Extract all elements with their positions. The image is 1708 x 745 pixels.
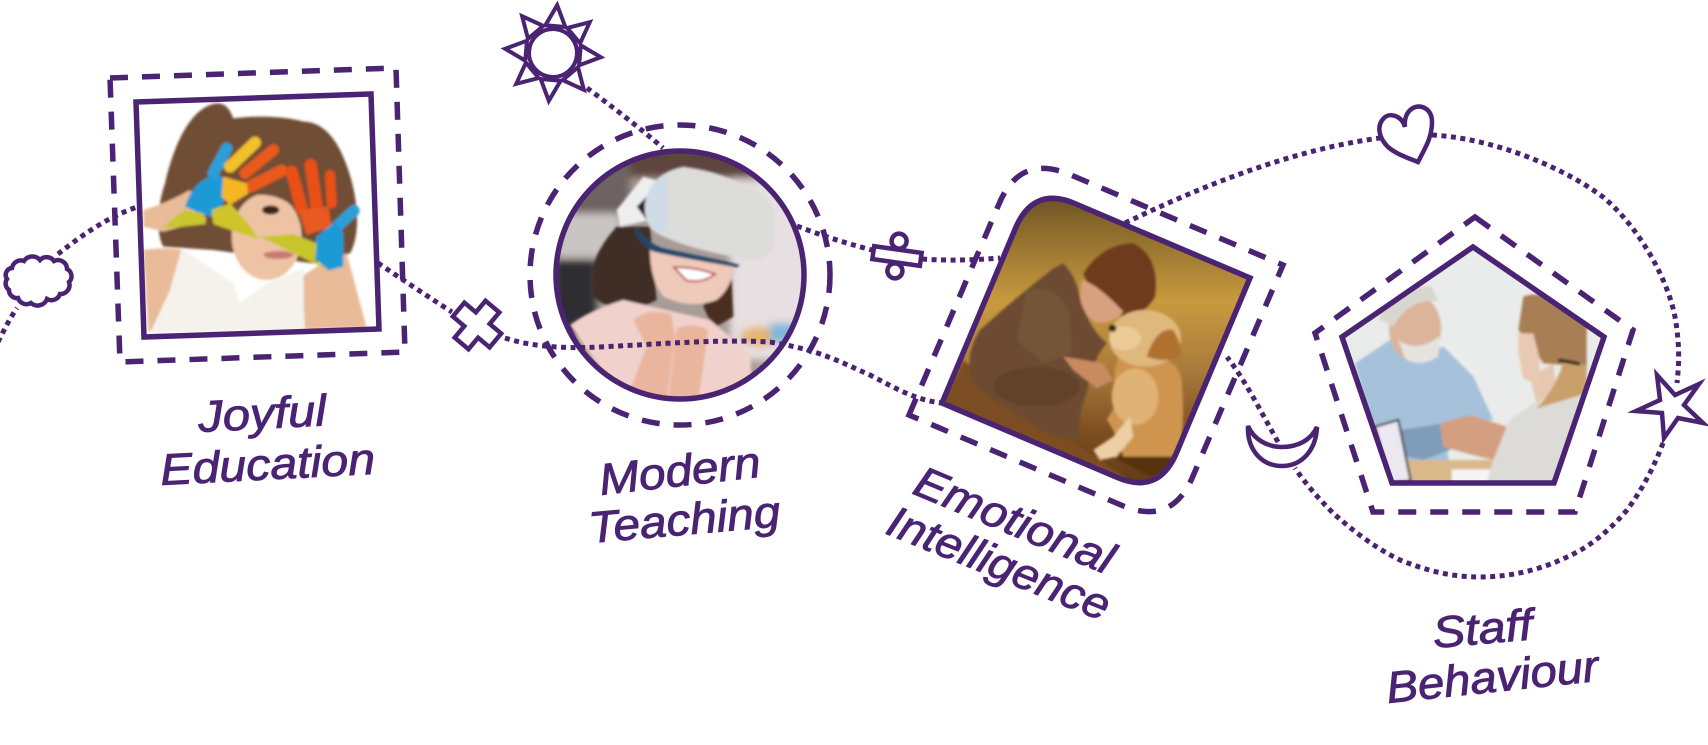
dotted journey path bbox=[0, 88, 1679, 577]
laptop bbox=[1375, 420, 1411, 483]
boy legs bbox=[995, 368, 1078, 405]
dashed pentagon bbox=[1315, 217, 1633, 512]
dog ear bbox=[1147, 330, 1181, 360]
panel: Joyful Education bbox=[110, 68, 405, 362]
arms and shoulders bbox=[143, 190, 367, 332]
woman shirt bbox=[1487, 390, 1587, 483]
label: Staff Behaviour bbox=[1384, 600, 1603, 713]
dog paw bbox=[1093, 417, 1133, 460]
label: Emotional Intelligence: Emotional bbox=[907, 457, 1123, 585]
log bbox=[1114, 455, 1170, 476]
handshake bbox=[1440, 415, 1507, 460]
dashed ring bbox=[530, 125, 830, 425]
label: Modern Teaching: Teaching bbox=[587, 487, 783, 553]
dashed frame: Joyful Education bbox=[110, 68, 405, 362]
dog head bbox=[1109, 310, 1181, 367]
boy arm bbox=[1063, 357, 1113, 388]
man beard bbox=[1398, 337, 1439, 363]
man shirt bbox=[1355, 340, 1493, 467]
left painted hand bbox=[185, 175, 228, 218]
photo border bbox=[136, 94, 379, 337]
icon: divide sign bbox=[870, 230, 924, 282]
blurred classroom background bbox=[550, 147, 810, 360]
photo border bbox=[942, 198, 1250, 483]
woman neck bbox=[1530, 363, 1557, 403]
dog chest bbox=[1112, 368, 1158, 425]
label: Joyful Education: Joyful bbox=[196, 386, 329, 442]
label: Joyful Education bbox=[159, 386, 376, 495]
boy sleeve bbox=[1018, 290, 1070, 361]
label: Staff Behaviour: Behaviour bbox=[1384, 642, 1603, 713]
table bbox=[1407, 460, 1497, 483]
woman face bbox=[1518, 333, 1540, 385]
ponytail bbox=[1537, 362, 1587, 408]
label: Modern Teaching bbox=[587, 438, 783, 553]
icon: star bbox=[1636, 375, 1703, 438]
dog nose bbox=[1109, 325, 1116, 332]
strap bbox=[635, 227, 740, 267]
icon: cloud bbox=[6, 256, 71, 306]
label: Emotional Intelligence: Intelligence bbox=[880, 497, 1117, 631]
label: Emotional Intelligence bbox=[880, 457, 1123, 631]
label: Staff Behaviour: Staff bbox=[1431, 600, 1540, 658]
hair bbox=[591, 227, 657, 310]
label: Modern Teaching: Modern bbox=[597, 438, 763, 505]
photo border bbox=[556, 151, 804, 399]
woman hair bbox=[1518, 295, 1587, 367]
photo: child in VR headset bbox=[558, 154, 802, 396]
photo: boy and golden retriever bbox=[946, 201, 1246, 480]
hair bbox=[159, 103, 357, 263]
label: Joyful Education: Education bbox=[159, 435, 376, 495]
photo: girl with painted hands bbox=[142, 102, 368, 334]
icon: crescent moon bbox=[1248, 426, 1317, 466]
headset bbox=[645, 167, 775, 259]
panel: Emotional Intelligence bbox=[909, 168, 1283, 512]
icon: heart bbox=[1379, 107, 1432, 162]
ground bbox=[943, 360, 1130, 480]
face bbox=[650, 250, 733, 304]
face bbox=[232, 193, 302, 280]
photo border bbox=[1342, 247, 1604, 483]
man head bbox=[1389, 295, 1441, 362]
dog body bbox=[1107, 353, 1183, 457]
fringe bbox=[258, 192, 290, 204]
photo: handshake bbox=[1346, 250, 1600, 480]
dress bbox=[150, 248, 304, 333]
boy body bbox=[970, 263, 1107, 440]
man sleeve bbox=[1400, 423, 1450, 460]
mouth bbox=[263, 251, 293, 259]
fists bbox=[631, 310, 676, 396]
icon: multiply cross bbox=[443, 291, 511, 359]
eye bbox=[262, 205, 279, 215]
boy face bbox=[1080, 280, 1123, 323]
dashed frame bbox=[909, 168, 1283, 512]
panel: Modern Teaching bbox=[530, 125, 830, 425]
smile bbox=[674, 267, 715, 281]
dog muzzle bbox=[1109, 326, 1141, 350]
man hair bbox=[1378, 286, 1438, 327]
hair tie bbox=[1558, 360, 1580, 364]
shirt bbox=[570, 300, 753, 400]
boy head bbox=[1083, 243, 1156, 317]
right painted hand bbox=[292, 172, 302, 208]
panel: Staff Behaviour bbox=[1315, 217, 1633, 512]
icon: sun bbox=[501, 1, 605, 105]
